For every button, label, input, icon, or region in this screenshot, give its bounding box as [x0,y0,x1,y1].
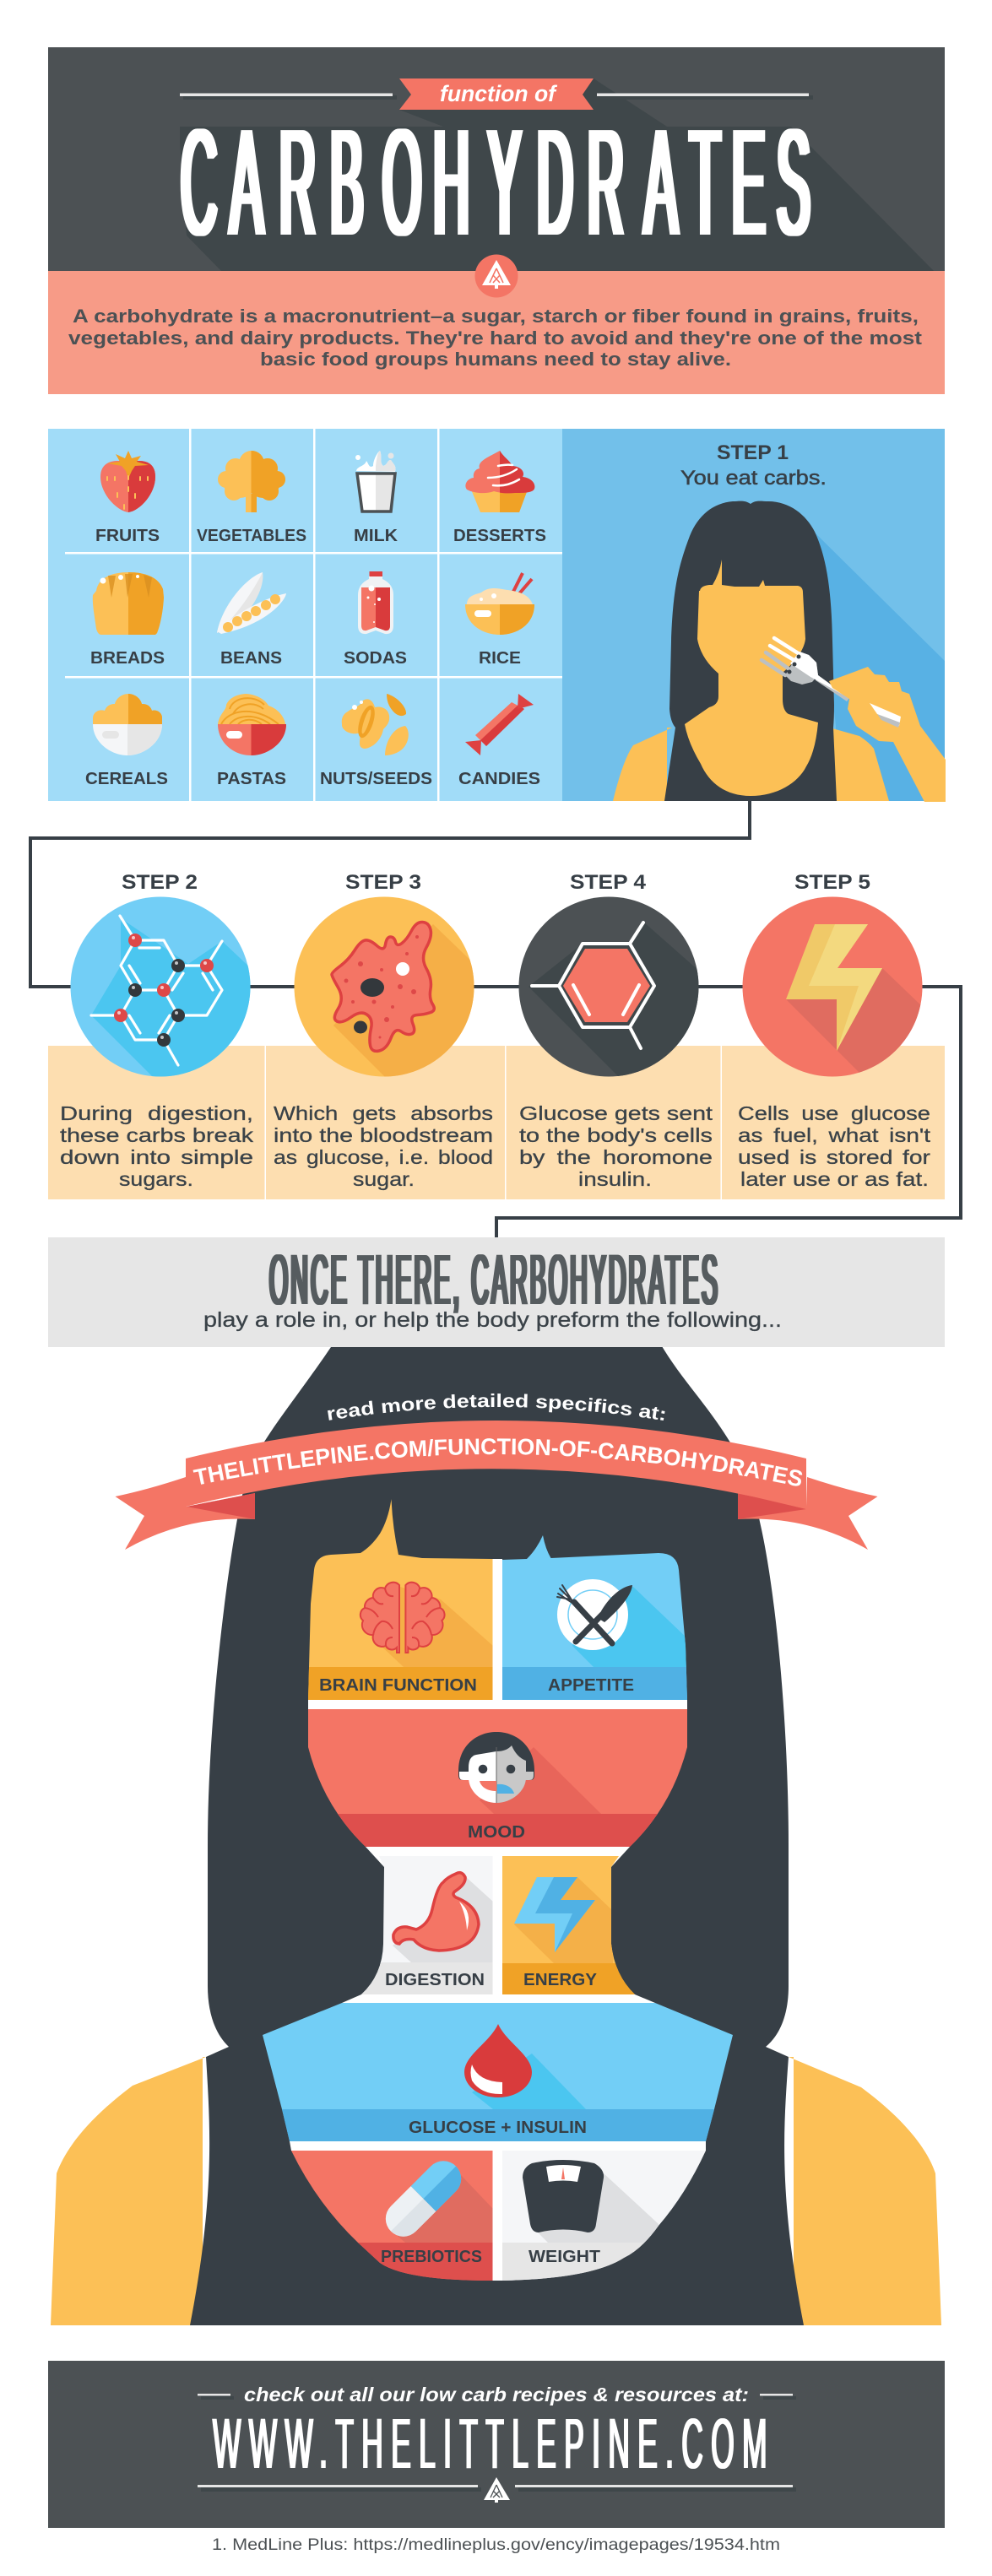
step 2 text: these carbs break [60,1124,253,1146]
step 2 text: sugars. [119,1168,193,1190]
footer rules [198,2394,796,2492]
footer url: WWW.THELITTLEPINE.COM [213,2404,775,2483]
icon: capsule [378,2154,469,2243]
step 4 text: Glucose gets sent [519,1102,713,1124]
logo badge [474,255,518,297]
icon: scale [523,2160,604,2232]
label: glucose + insulin: GLUCOSE + INSULIN [409,2119,587,2137]
left rule [180,93,397,100]
food labels: DESSERTS [453,527,546,545]
icon: cupcake [465,451,534,512]
icon: candy [465,694,534,755]
ribbon banner [115,1421,878,1550]
figure: big woman silhouette [51,1342,941,2325]
label: appetite: APPETITE [548,1676,634,1695]
panel: once there heading [48,1237,945,1347]
food labels: MILK [354,527,398,545]
panel: food grid [48,429,562,801]
icon: blue bolt [514,1877,595,1952]
step 4 [518,871,713,1190]
ribbon: function of: function of [440,81,558,106]
step 1 caption: You eat carbs. [680,467,827,490]
icon: pasta bowl [218,694,286,755]
step 5 text [738,1102,931,1190]
step 5 text: used is stored for [738,1146,930,1168]
fork [762,638,849,701]
step 2 [60,871,253,1190]
subheading: play a role in, or help the body preform the following... [203,1308,782,1332]
food labels [85,527,546,788]
step 4 text: insulin. [578,1168,652,1190]
tile: prebiotics [287,2148,498,2285]
step 5 [738,871,931,1190]
footer logo [484,2477,510,2503]
step 3 text: into the bloodstream [274,1124,493,1146]
long shadow of the title [180,78,934,271]
step 4 heading: STEP 4 [570,871,647,894]
ribbon: function of [399,78,594,110]
food labels: BREADS [90,649,165,668]
tile: digestion [361,1856,493,1994]
step 4 text: by the horomone [519,1146,713,1168]
connector line [30,801,961,1237]
tile: energy [502,1856,635,1994]
step 4 text [519,1102,713,1190]
intro background [48,271,945,394]
ribbon text: THELITTLEPINE.COM/FUNCTION-OF-CARBOHYDRATES [192,1438,802,1486]
icon: lightning bolt [742,896,924,1089]
food labels: FRUITS [95,527,160,545]
step 2 text [60,1102,253,1190]
shoulders [51,2057,941,2325]
tile: weight [498,2148,709,2285]
hand and forearm [829,667,946,802]
icon: blood drop [464,2024,532,2097]
icon: strawberry [100,451,155,512]
food labels: CANDIES [458,770,540,788]
intro text: A carbohydrate is a macronutrient–a sugar, starch or fiber found in grains, fruits, [73,306,919,327]
step 5 text: Cells use glucose [738,1102,930,1124]
right rule [597,93,813,100]
step 3 text: sugar. [353,1168,415,1190]
step 2 text: During digestion, [60,1102,253,1124]
icon: bread [93,572,164,635]
panel: step 1 [562,429,946,802]
food labels: NUTS/SEEDS [320,770,432,788]
intro text: vegetables, and dairy products. They're hard to avoid and they're one of the most [68,327,923,349]
step 2 heading: STEP 2 [122,871,198,894]
icon: nuts and seeds [342,694,409,755]
footnote: 1. MedLine Plus: https://medlineplus.gov/ency/imagepages/19534.htm [212,2536,780,2554]
icon: molecule [70,896,253,1089]
step 5 text: as fuel, what isn't [738,1124,931,1146]
food labels: PASTAS [217,770,286,788]
icon: stomach [393,1873,479,1951]
intro text [68,306,923,370]
step 1 heading: STEP 1 [717,441,789,464]
footer tagline: check out all our low carb recipes & resources at: [244,2384,749,2406]
icon: soda bottle [358,571,393,634]
heading: once there: ONCE THERE, CARBOHYDRATES [269,1241,720,1320]
label: prebiotics: PREBIOTICS [381,2248,482,2266]
step 3 text: Which gets absorbs [274,1102,493,1124]
panel: steps background [48,1046,945,1199]
step 3 heading: STEP 3 [345,871,421,894]
icon: broccoli [218,451,285,512]
food labels: BEANS [220,649,282,668]
step 2 text: down into simple [60,1146,253,1168]
icon: brain [360,1583,445,1653]
step 3 text [274,1102,493,1190]
tile: mood [304,1705,692,1848]
curved caption: read more detailed specifics at: [328,1394,665,1421]
label: brain function: BRAIN FUNCTION [319,1676,477,1695]
food labels: VEGETABLES [197,527,306,545]
label: weight: WEIGHT [529,2248,600,2266]
food labels: CEREALS [85,770,168,788]
step 3 text: as glucose, i.e. blood [274,1146,493,1168]
woman eating [613,501,946,802]
icon: happy and sad face [458,1732,534,1803]
label: mood: MOOD [468,1823,525,1842]
intro text: basic food groups humans need to stay alive. [260,349,731,370]
icon: plate and cutlery [557,1579,632,1650]
icon: hexagon [518,896,701,1089]
hair and tank top [190,1342,804,2325]
icon: bean pods [217,572,286,634]
step 5 heading: STEP 5 [794,871,870,894]
footer panel [48,2361,945,2528]
food labels: RICE [479,649,521,668]
white gaps in the face [290,1559,706,2281]
title: CARBOHYDRATES [181,99,810,268]
label: energy: ENERGY [523,1971,598,1989]
icon: milk glass [355,451,396,511]
step 4 text: to the body's cells [519,1124,713,1146]
tile: appetite [502,1535,687,1700]
tile: glucose + insulin [253,2000,743,2144]
header panel [48,47,945,394]
tile: brain function [304,1494,498,1705]
icon: cell [294,896,474,1077]
label: digestion: DIGESTION [385,1971,485,1989]
icon: cereal bowl [93,694,162,755]
step 5 text: later use or as fat. [740,1168,929,1190]
food labels: SODAS [344,649,407,668]
icon: rice bowl [465,573,534,635]
step 3 [274,871,493,1190]
